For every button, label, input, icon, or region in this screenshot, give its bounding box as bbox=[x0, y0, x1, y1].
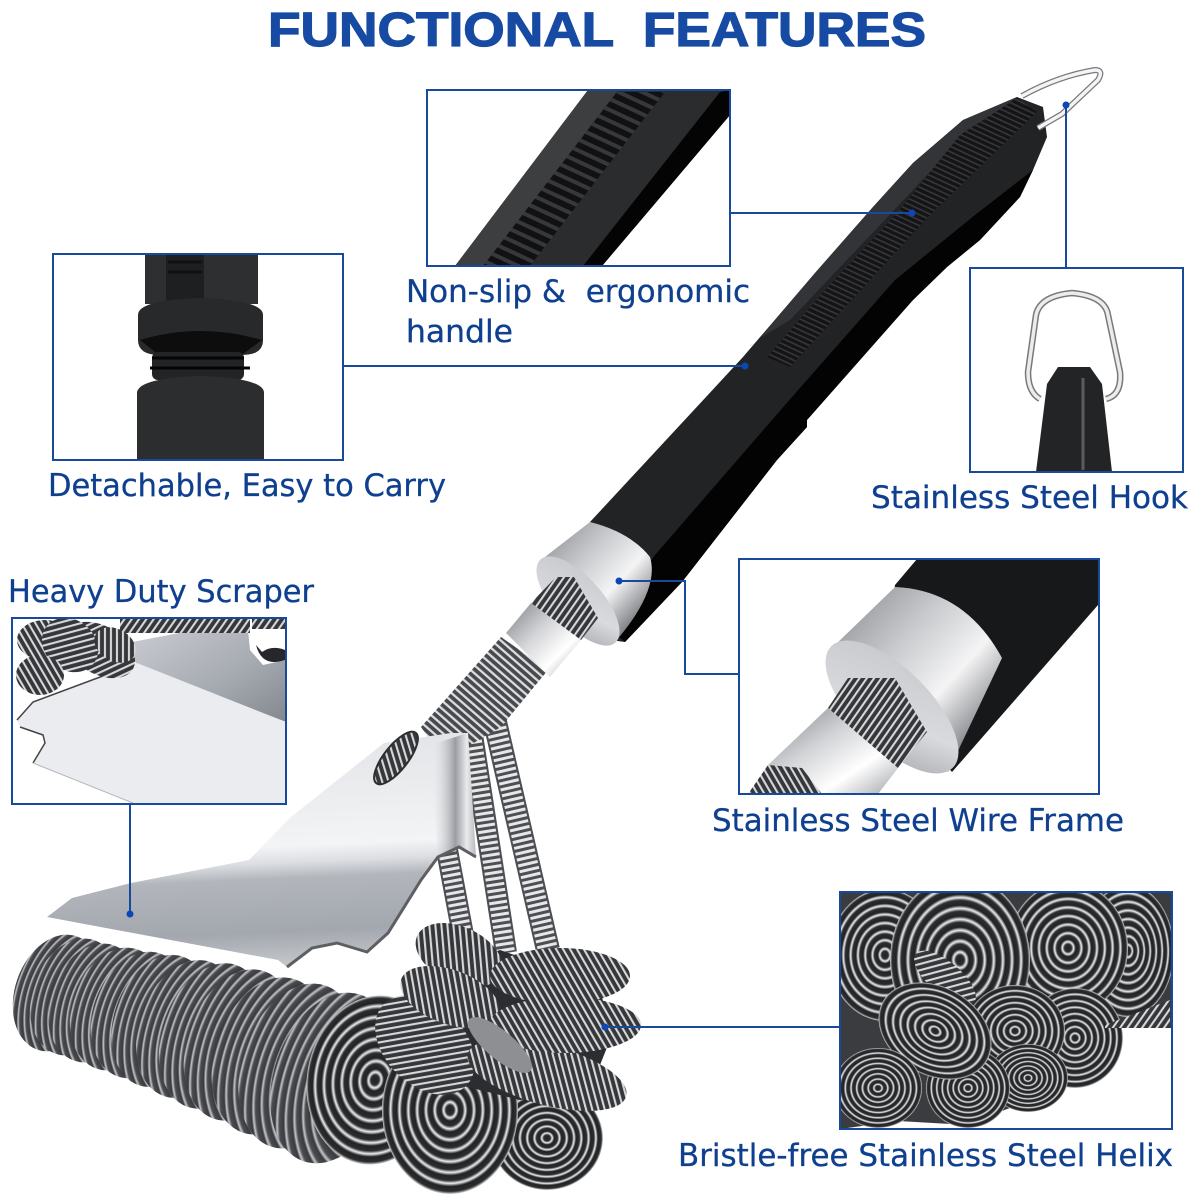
detail image: helix bbox=[841, 893, 1171, 1128]
scraper notch edge bbox=[287, 847, 476, 967]
flower petals of helix bbox=[356, 910, 641, 1125]
detail image: collar bbox=[748, 559, 1100, 795]
callout: non-slip handle: handle bbox=[406, 314, 513, 350]
label: Stainless Steel Hook bbox=[871, 480, 1188, 516]
label: Heavy Duty Scraper bbox=[8, 574, 314, 610]
metal collar bbox=[541, 522, 652, 642]
label: Non-slip & ergonomic bbox=[406, 274, 750, 310]
handle lower shadow band bbox=[605, 170, 1033, 642]
wire frame rods bbox=[447, 722, 548, 953]
callout: stainless steel hook bbox=[871, 102, 1188, 516]
detail image: handle bbox=[455, 90, 730, 266]
label: Detachable, Easy to Carry bbox=[48, 468, 446, 504]
callout: heavy duty scraper bbox=[8, 574, 314, 918]
detail image: hook bbox=[1028, 293, 1120, 472]
collar coil bbox=[531, 577, 598, 640]
detail image: scraper bbox=[16, 607, 286, 804]
scraper blade bbox=[47, 733, 476, 967]
blade fold bbox=[430, 733, 476, 857]
callout: stainless steel wire frame bbox=[616, 559, 1124, 839]
label: Bristle-free Stainless Steel Helix bbox=[678, 1138, 1173, 1174]
hanging hook bbox=[1022, 70, 1100, 128]
handle grip bbox=[590, 97, 1047, 642]
label: Stainless Steel Wire Frame bbox=[712, 803, 1124, 839]
callout: non-slip handle bbox=[406, 90, 916, 350]
helix roller bbox=[0, 923, 603, 1194]
upper coil bbox=[421, 637, 548, 745]
title: FUNCTIONAL FEATURES bbox=[268, 4, 926, 57]
callout: bristle-free helix bbox=[602, 876, 1174, 1174]
wire connector bbox=[506, 603, 581, 677]
handle ribbed texture bbox=[767, 98, 1037, 367]
handle upper facet bbox=[760, 97, 1017, 338]
detail image: joint bbox=[137, 254, 264, 460]
callout: detachable bbox=[48, 254, 748, 504]
scraper slot bbox=[367, 725, 425, 791]
